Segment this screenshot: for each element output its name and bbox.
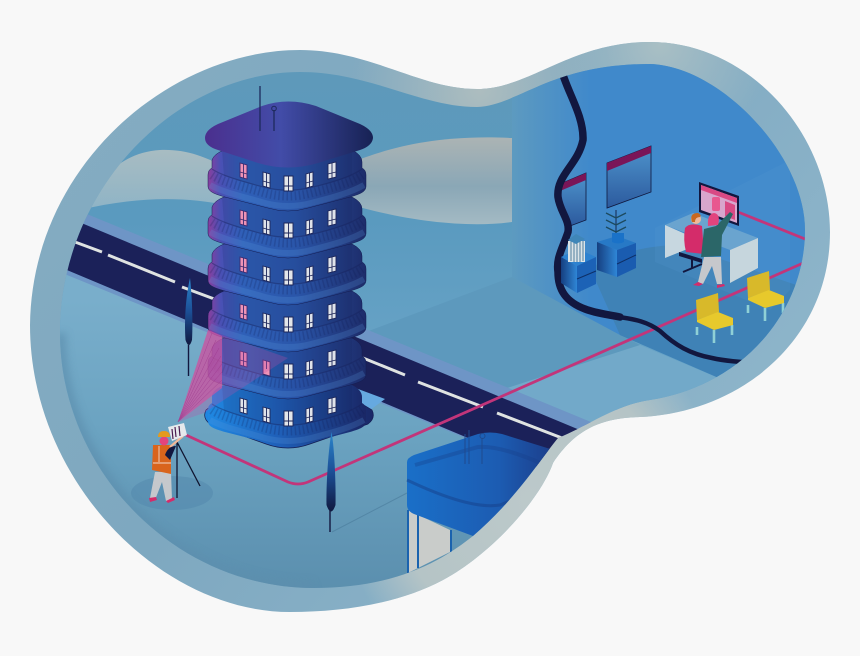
tower [205,86,373,448]
tree: back [185,278,192,376]
seated person [679,213,704,272]
tripod [177,442,200,498]
beam on tower [178,330,288,422]
roof [205,102,373,168]
room floor [596,246,796,377]
floor 3 [208,244,366,305]
inner scene [60,64,805,588]
arm [170,436,183,447]
chair [696,293,733,343]
lower ground [60,275,548,588]
ground shadow [131,476,213,510]
lit wedge near tower base [358,388,385,409]
asphalt [68,224,578,466]
base slab [204,404,374,448]
desk [665,213,758,283]
legs [150,472,172,501]
icon: book stack [568,234,585,262]
beam rays [178,333,222,422]
scanner [168,423,187,441]
window: right [607,146,651,208]
lit back wall [655,160,790,310]
road [66,214,591,466]
black cable [558,68,756,363]
plaza ground [371,322,716,426]
soft inner fade at the lower left edge [60,333,313,588]
scanner beam [178,330,288,422]
hills [80,137,512,224]
beam on ground [178,330,222,422]
floor 6 [208,385,366,446]
floor 5 [208,338,366,399]
chair [747,271,784,321]
floor 2 [208,197,366,258]
surveyor [131,423,213,510]
upper ground [64,64,805,410]
head [160,436,168,446]
floor 1 [208,150,366,211]
vest [152,445,171,474]
standing person [693,212,733,288]
lower curb [66,270,466,438]
room wall [512,64,805,377]
side cabinet with books [561,234,596,293]
tree shadow [332,493,407,532]
floor 4 [208,291,366,352]
icon: potted plant [606,210,626,244]
lane markings [75,242,562,438]
cabinet with plant [597,210,636,277]
window: left [560,173,586,226]
pink data cable [186,212,810,484]
small foreground building [407,430,560,573]
upper curb [84,214,591,430]
antennas [260,86,276,131]
right room [512,64,805,377]
tree: front [326,432,336,532]
monitor [699,182,739,226]
